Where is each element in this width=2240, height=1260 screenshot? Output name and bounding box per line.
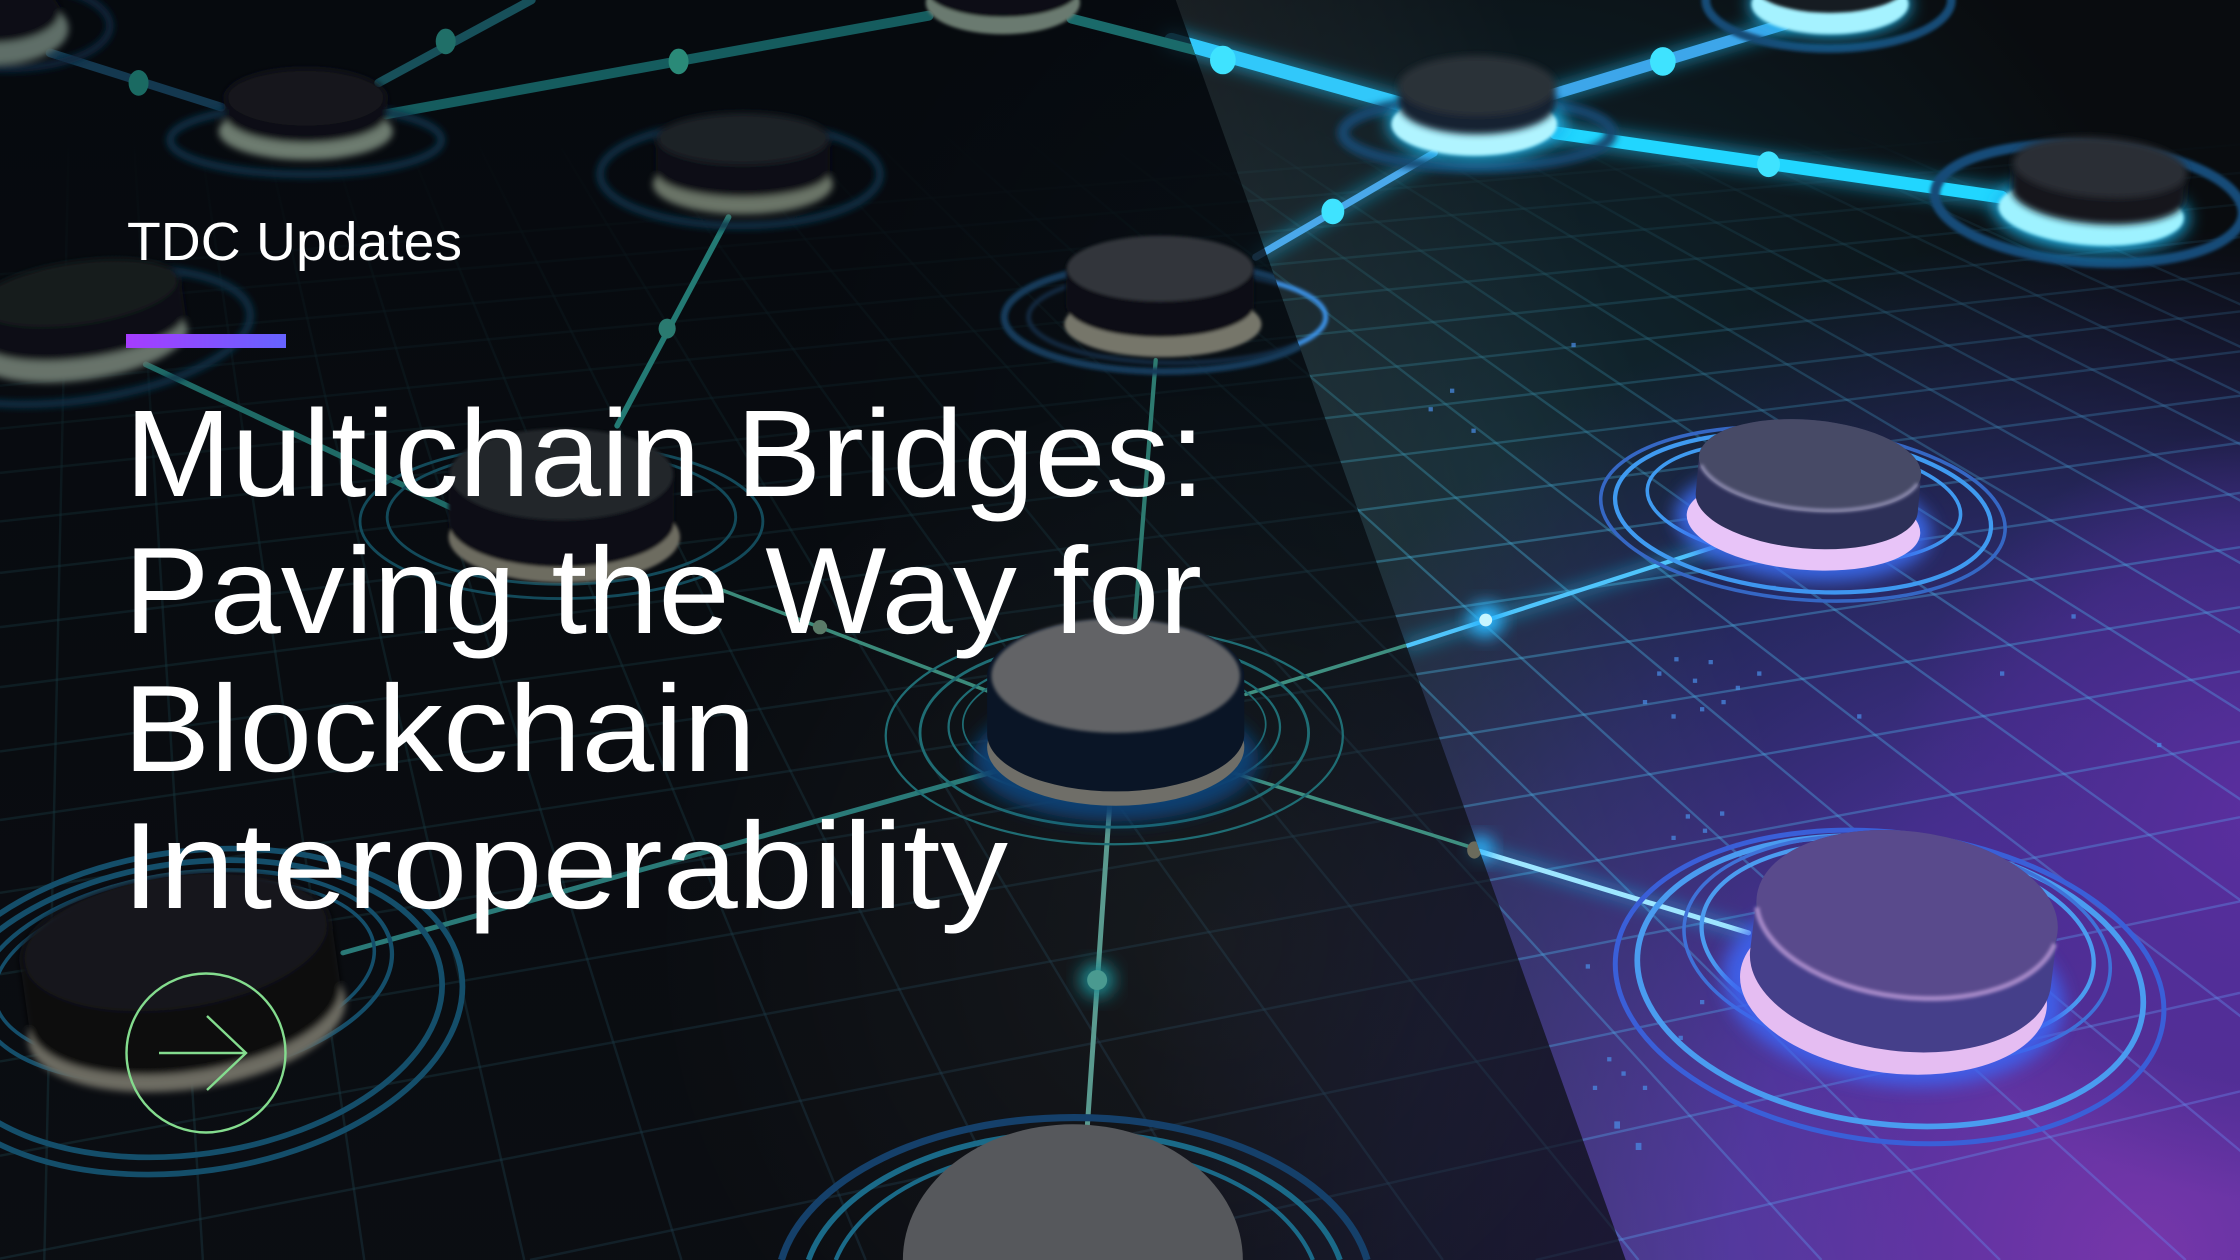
connector lines: left side	[50, 0, 1480, 1129]
node: top left edge	[0, 0, 110, 69]
icon: arrow in circle	[126, 974, 286, 1132]
node: bottom centre	[781, 1118, 1367, 1260]
node: left edge	[0, 258, 258, 412]
node: ring of centre-top node on the lit side	[1029, 271, 1326, 363]
node: top centre glowing hub	[1343, 56, 1611, 167]
node: upper right	[1931, 126, 2240, 273]
left scene seen through the overlay	[0, 0, 1481, 1260]
connector lines: right side	[1171, 24, 2001, 933]
eyebrow: TDC Updates: TDC Updates	[127, 212, 462, 272]
node: large lower left	[0, 846, 466, 1178]
node: top edge centre	[926, 0, 1080, 34]
node: top left	[170, 69, 441, 174]
data dots	[1429, 343, 2161, 1150]
connector dots: left side	[129, 29, 1481, 997]
node: upper middle	[600, 113, 880, 226]
connector dots: right side	[1210, 46, 1780, 861]
title: Interoperability	[122, 798, 1009, 935]
node: lower right purple	[1597, 797, 2182, 1174]
title	[122, 386, 1205, 935]
node: central hub	[886, 619, 1343, 844]
title: Multichain Bridges:	[125, 386, 1205, 523]
node: top right edge	[1706, 0, 1951, 49]
accent bar	[126, 334, 286, 348]
node: centre top	[1004, 236, 1324, 371]
node: mid right purple	[1593, 402, 2013, 617]
title: Paving the Way for	[124, 523, 1202, 660]
title: Blockchain	[123, 661, 756, 798]
node: behind title	[360, 429, 763, 599]
panel: dark overlay	[0, 0, 1626, 1260]
